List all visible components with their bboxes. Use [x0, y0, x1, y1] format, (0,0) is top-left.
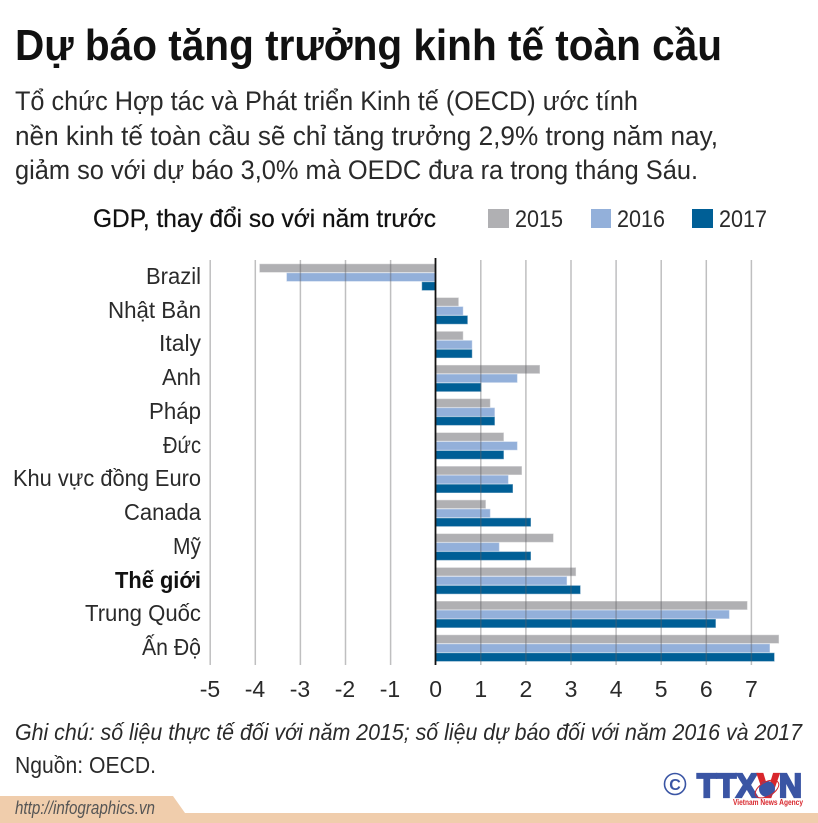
- axis tick labels: -3: [290, 676, 310, 702]
- country labels: Canada: [124, 499, 201, 525]
- axis tick labels: 0: [429, 676, 442, 702]
- intro text: nền kinh tế toàn cầu sẽ chỉ tăng trưởng 2,9% trong năm nay,: [15, 121, 718, 151]
- icon: copyright: C: [669, 777, 681, 794]
- axis tick labels: 2: [520, 676, 532, 702]
- country labels: Pháp: [149, 398, 201, 424]
- legend: 2015: [515, 206, 563, 233]
- grid lines: [210, 260, 751, 665]
- legend: [488, 206, 767, 233]
- intro text: giảm so với dự báo 3,0% mà OEDC đưa ra trong tháng Sáu.: [15, 155, 698, 185]
- source: Nguồn: OECD.: [15, 752, 156, 778]
- logo globe: [752, 776, 782, 802]
- country labels: Mỹ: [173, 533, 201, 559]
- legend: 2016: [617, 206, 665, 233]
- country labels: Brazil: [146, 263, 201, 289]
- legend: 2017: [719, 206, 767, 233]
- axis tick labels: -2: [335, 676, 355, 702]
- logo wordmark: TTXVN: [697, 767, 802, 804]
- footer band: [0, 796, 818, 823]
- logo tagline: Vietnam News Agency: [733, 798, 803, 807]
- axis tick labels: 3: [565, 676, 577, 702]
- axis tick labels: -5: [200, 676, 220, 702]
- country labels: [13, 263, 201, 660]
- axis tick labels: 4: [610, 676, 623, 702]
- country labels: Nhật Bản: [108, 297, 201, 323]
- axis tick labels: [200, 676, 758, 702]
- footer url: http://infographics.vn: [15, 798, 155, 818]
- axis tick labels: 6: [700, 676, 713, 702]
- bar chart: [13, 258, 779, 702]
- country labels: Khu vực đồng Euro: [13, 465, 201, 491]
- title: Dự báo tăng trưởng kinh tế toàn cầu: [15, 21, 722, 70]
- country labels: Ấn Độ: [142, 633, 201, 660]
- bars: [260, 264, 779, 661]
- axis tick labels: 5: [655, 676, 668, 702]
- axis tick labels: 1: [474, 676, 487, 702]
- country labels: Trung Quốc: [85, 600, 201, 626]
- chart heading: GDP, thay đổi so với năm trước: [93, 205, 436, 233]
- logo: TTXVN: [664, 767, 803, 807]
- intro text: Tổ chức Hợp tác và Phát triển Kinh tế (OECD) ước tính: [15, 86, 638, 116]
- country labels: Thế giới: [115, 567, 201, 593]
- axis tick labels: -4: [245, 676, 265, 702]
- axis tick labels: 7: [745, 676, 758, 702]
- country labels: Anh: [162, 364, 201, 390]
- axis tick labels: -1: [380, 676, 400, 702]
- zero axis: [435, 258, 436, 665]
- country labels: Italy: [159, 330, 201, 356]
- intro text: [15, 86, 718, 185]
- country labels: Đức: [163, 432, 201, 458]
